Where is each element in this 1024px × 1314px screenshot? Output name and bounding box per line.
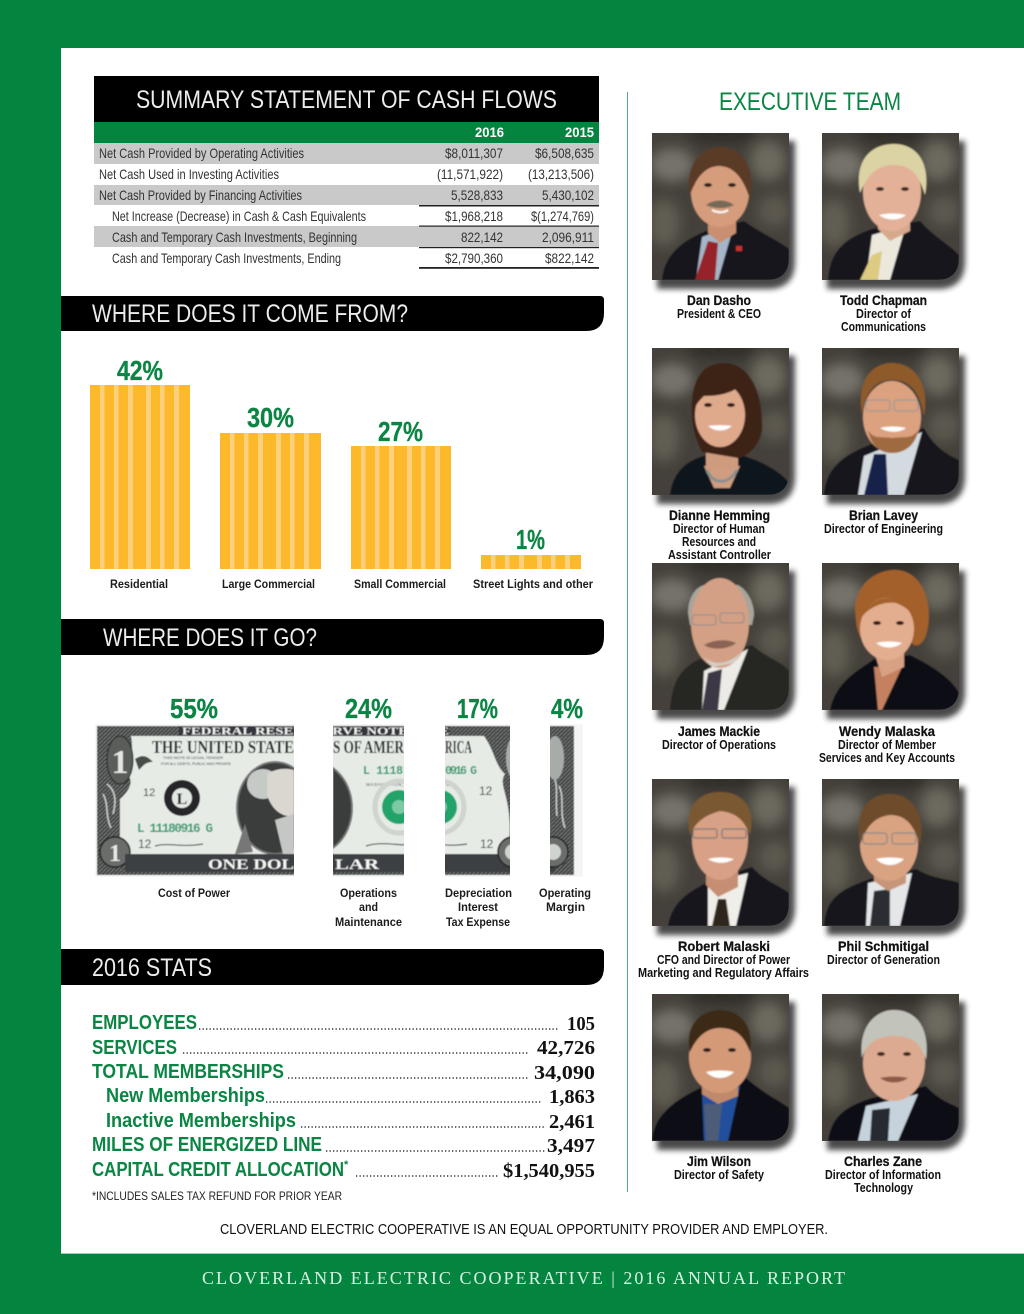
name block: Phil Schmitigal [827, 938, 940, 967]
table row: operating: $6,508,635 [535, 145, 594, 161]
bar: large commercial: Large Commercial [222, 577, 315, 591]
table row: ending [112, 250, 594, 266]
portrait: Jim Wilson [646, 988, 795, 1150]
table column years [475, 124, 594, 140]
stat: services: 42,726 [537, 1037, 595, 1059]
slice: operating margin: Margin [546, 900, 585, 914]
bar: small commercial: 27% [378, 416, 423, 447]
name block: Brian Lavey: Brian Lavey [849, 507, 918, 523]
stat: services: SERVICES [92, 1037, 177, 1059]
table row: financing: Net Cash Provided by Financing Activities [99, 187, 302, 203]
bar: street lights: Street Lights and other [473, 577, 593, 591]
portrait: Robert Malaski [646, 773, 795, 935]
heading band: where does it go: WHERE DOES IT GO? [103, 624, 317, 652]
stat: capital credit allocation: CAPITAL CREDIT ALLOCATION [92, 1159, 344, 1181]
bar: small commercial [351, 416, 451, 591]
name block: Charles Zane: Charles Zane [844, 1153, 922, 1169]
heading band: where does it go [61, 619, 604, 655]
heading band: 2016 stats [61, 949, 604, 985]
stat: miles of energized line: MILES OF ENERGIZED LINE [92, 1134, 322, 1156]
table row: ending: $822,142 [545, 250, 594, 266]
name block: James Mackie: Director of Operations [662, 738, 776, 752]
portrait: Brian Lavey [816, 342, 965, 504]
column divider [627, 92, 628, 1192]
name block: Robert Malaski [638, 938, 809, 980]
table row: operating [99, 145, 594, 161]
name block: Todd Chapman: Todd Chapman [840, 292, 927, 308]
table row: beginning [112, 229, 594, 245]
footer top highlight [61, 1253, 1024, 1254]
stat: capital credit allocation: * [344, 1159, 349, 1171]
table column years: 2016 [475, 124, 504, 140]
name block: Phil Schmitigal: Director of Generation [827, 953, 940, 967]
name block: Dianne Hemming: Dianne Hemming [669, 507, 770, 523]
panel: stats list [92, 1012, 595, 1203]
heading band: 2016 stats: 2016 STATS [92, 954, 212, 982]
table column years: 2015 [565, 124, 594, 140]
table row: financing: 5,528,833 [451, 187, 503, 203]
stat: new memberships [106, 1085, 595, 1108]
table row: investing: (11,571,922) [437, 166, 503, 182]
name block: James Mackie: James Mackie [678, 723, 760, 739]
name block: Brian Lavey [824, 507, 943, 536]
name block: Wendy Malaska: Services and Key Accounts [819, 751, 955, 765]
table row: operating: Net Cash Provided by Operating Activities [99, 145, 304, 161]
slice: depreciation interest tax: Depreciation [445, 886, 512, 900]
table row: net increase: $(1,274,769) [531, 208, 594, 224]
name block: Charles Zane: Director of Information [825, 1168, 941, 1182]
slice: operating margin: Operating [539, 886, 591, 900]
name block: Todd Chapman [840, 292, 927, 334]
stat: miles of energized line [92, 1134, 595, 1157]
portrait: Charles Zane [816, 988, 965, 1150]
slice: cost of power [96, 698, 294, 897]
slice: operations and maintenance: and [359, 900, 378, 914]
bar: street lights: 1% [516, 524, 545, 555]
table row: net increase [112, 208, 594, 224]
name block: Dianne Hemming: Assistant Controller [668, 548, 771, 562]
heading band: where does it come from: WHERE DOES IT COME FROM? [92, 300, 408, 328]
stat: employees: 105 [567, 1013, 595, 1035]
stat: employees [92, 1012, 595, 1035]
table row: financing: 5,430,102 [542, 187, 594, 203]
name block: Jim Wilson [674, 1153, 764, 1182]
slice: depreciation interest tax: Interest [458, 900, 498, 914]
name block: James Mackie [662, 723, 776, 752]
bar: small commercial: Small Commercial [354, 577, 446, 591]
footer line: CLOVERLAND ELECTRIC COOPERATIVE | 2016 ANNUAL REPORT [202, 1268, 845, 1288]
name block: Dan Dasho [677, 292, 761, 321]
footnote: *INCLUDES SALES TAX REFUND FOR PRIOR YEAR [92, 1189, 342, 1203]
name block: Dianne Hemming: Resources and [682, 535, 756, 549]
bar: residential: Residential [110, 577, 168, 591]
table row: financing [99, 187, 594, 203]
name block: Wendy Malaska [819, 723, 955, 765]
table row: beginning: 2,096,911 [542, 229, 594, 245]
portrait: Dianne Hemming [646, 342, 795, 504]
slice: depreciation interest tax [445, 698, 512, 928]
portrait: Phil Schmitigal [816, 773, 965, 935]
portrait: Todd Chapman [816, 127, 965, 289]
slice: operating margin [539, 698, 590, 914]
stat: total memberships: 34,090 [534, 1062, 595, 1084]
name block: Charles Zane: Technology [854, 1181, 913, 1195]
slice: cost of power: 55% [170, 693, 218, 724]
name block: Robert Malaski: Marketing and Regulatory Affairs [638, 966, 809, 980]
name block: Robert Malaski: Robert Malaski [678, 938, 770, 954]
portrait: Dan Dasho [646, 127, 795, 289]
slice: operating margin: 4% [551, 693, 583, 724]
bar: residential [90, 355, 190, 591]
name block: Dianne Hemming [668, 507, 771, 562]
table row: ending: $2,790,360 [445, 250, 503, 266]
panel: executive portraits [646, 127, 965, 1150]
table row: net increase: $1,968,218 [445, 208, 503, 224]
table row: beginning: 822,142 [461, 229, 503, 245]
table row: beginning: Cash and Temporary Cash Investments, Beginning [112, 229, 357, 245]
stat: miles of energized line: 3,497 [547, 1135, 595, 1157]
table row: operating: $8,011,307 [445, 145, 503, 161]
name block: Wendy Malaska: Wendy Malaska [839, 723, 935, 739]
name block: Dianne Hemming: Director of Human [673, 522, 765, 536]
slice: operations and maintenance: 24% [345, 693, 392, 724]
heading band: where does it come from [61, 296, 604, 331]
stat: inactive memberships: Inactive Memberships [106, 1110, 296, 1132]
name block: Todd Chapman: Communications [841, 320, 926, 334]
table row: investing [99, 166, 594, 182]
name block: Brian Lavey: Director of Engineering [824, 522, 943, 536]
table row: net increase: Net Increase (Decrease) in Cash & Cash Equivalents [112, 208, 366, 224]
panel: summary statement of cash flows [94, 76, 599, 269]
bar: street lights [473, 524, 593, 591]
slice: depreciation interest tax: 17% [457, 693, 498, 724]
stat: new memberships: 1,863 [549, 1086, 595, 1108]
name block: Jim Wilson: Jim Wilson [687, 1153, 751, 1169]
name block: Todd Chapman: Director of [856, 307, 912, 321]
name block: Charles Zane [825, 1153, 941, 1195]
chart: dollar bill expense breakdown [95, 693, 591, 929]
slice: cost of power: Cost of Power [158, 886, 230, 900]
name block: Robert Malaski: CFO and Director of Power [657, 953, 790, 967]
slice: depreciation interest tax: Tax Expense [446, 915, 510, 929]
table row: ending: Cash and Temporary Cash Investments, Ending [112, 250, 341, 266]
stat: inactive memberships [106, 1110, 595, 1133]
stat: new memberships: New Memberships [106, 1085, 265, 1107]
stat: employees: EMPLOYEES [92, 1012, 197, 1034]
table row: investing: (13,213,506) [528, 166, 594, 182]
name block: Dan Dasho: Dan Dasho [687, 292, 751, 308]
stat: total memberships [92, 1061, 595, 1084]
name block: Jim Wilson: Director of Safety [674, 1168, 764, 1182]
heading: executive team: EXECUTIVE TEAM [719, 88, 901, 116]
table row: investing: Net Cash Used in Investing Activities [99, 166, 279, 182]
slice: operations and maintenance [333, 698, 404, 926]
slice: operations and maintenance: Maintenance [335, 915, 402, 929]
stat: services [92, 1037, 595, 1059]
name block: Phil Schmitigal: Phil Schmitigal [838, 938, 929, 954]
portrait: Wendy Malaska [816, 557, 965, 719]
heading: summary statement: SUMMARY STATEMENT OF CASH FLOWS [136, 86, 557, 114]
name block: Dan Dasho: President & CEO [677, 307, 761, 321]
stat: capital credit allocation [92, 1159, 595, 1182]
bar: residential: 42% [117, 355, 163, 386]
bar: large commercial [220, 402, 321, 591]
slice: operations and maintenance: Operations [340, 886, 397, 900]
bar chart: revenue sources [90, 355, 593, 591]
name block: Wendy Malaska: Director of Member [838, 738, 936, 752]
stat: inactive memberships: 2,461 [549, 1111, 595, 1133]
stat: capital credit allocation: $1,540,955 [503, 1160, 595, 1182]
equal opportunity statement: CLOVERLAND ELECTRIC COOPERATIVE IS AN EQUAL OPPORTUNITY PROVIDER AND EMPLOYER. [220, 1221, 828, 1238]
portrait: James Mackie [646, 557, 795, 719]
stat: total memberships: TOTAL MEMBERSHIPS [92, 1061, 284, 1083]
bar: large commercial: 30% [247, 402, 294, 433]
